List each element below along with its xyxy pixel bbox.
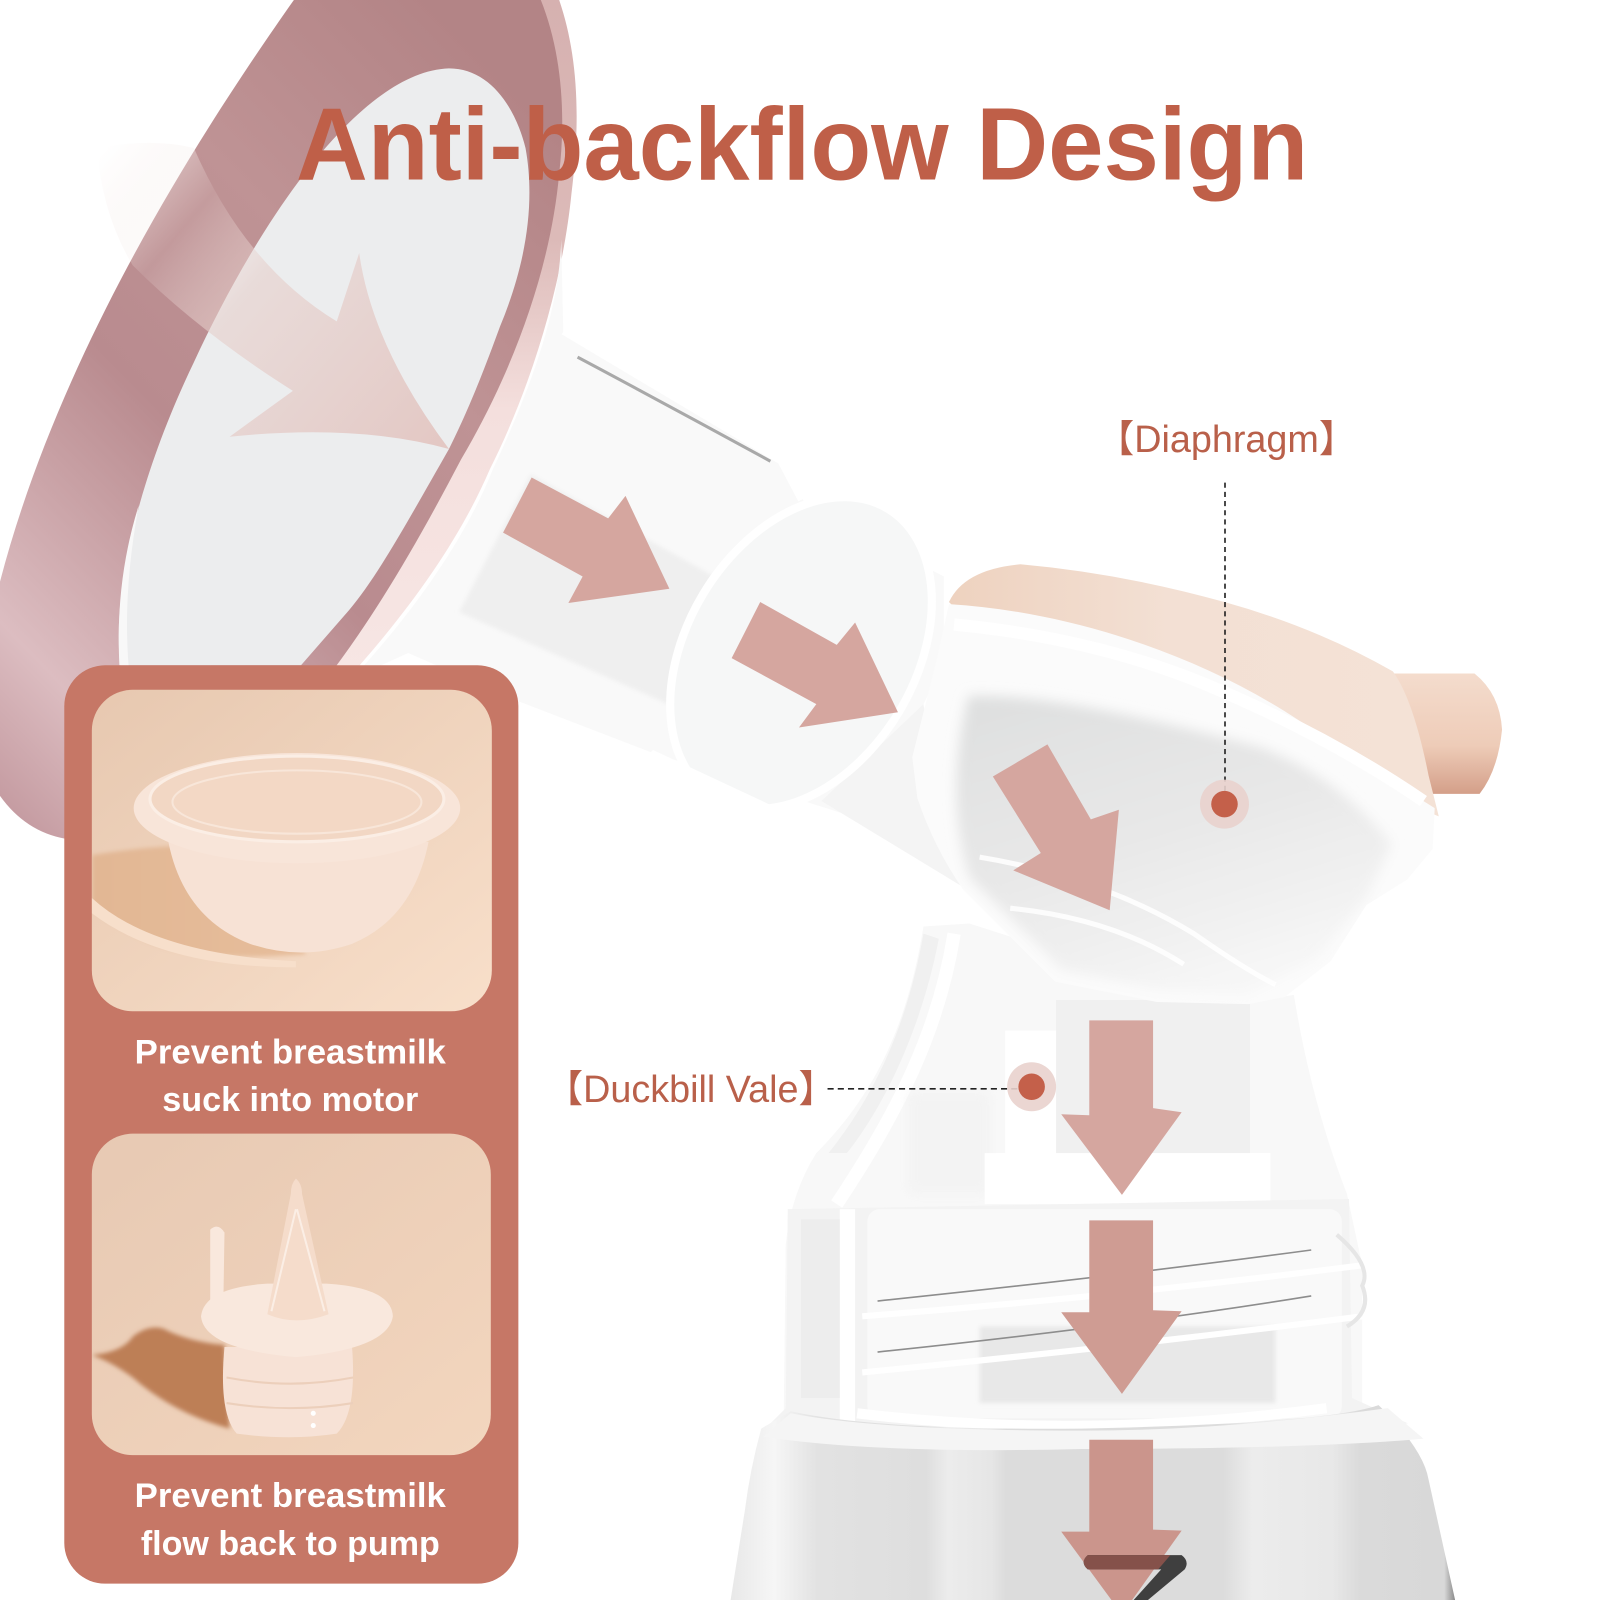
callout: duckbill valve xyxy=(545,1062,1056,1111)
flange inner funnel xyxy=(119,68,529,665)
callout: diaphragm xyxy=(1096,418,1357,829)
text: prevent flow back: flow back to pump xyxy=(141,1525,440,1563)
breast shield flange xyxy=(0,0,577,839)
diaphragm peach lid xyxy=(949,564,1502,816)
text: prevent suck into motor xyxy=(135,1033,447,1119)
large curved arrow xyxy=(97,143,449,449)
arrow: flow in tube 2 xyxy=(732,602,898,728)
text: prevent suck into motor: Prevent breastmilk xyxy=(135,1033,447,1071)
title: Anti-backflow Design xyxy=(296,87,1308,202)
callout: duckbill valve: 【Duckbill Vale】 xyxy=(545,1068,836,1110)
bottle body xyxy=(731,1405,1455,1600)
diaphragm white cup xyxy=(912,604,1435,1004)
arrow: flow through collar xyxy=(1061,1220,1182,1394)
panel: valve parts xyxy=(64,665,518,1584)
bottle logo mark xyxy=(1084,1555,1187,1600)
connector tube xyxy=(352,240,986,918)
card: diaphragm photo xyxy=(92,690,492,1011)
card: duckbill valve photo xyxy=(92,1134,491,1455)
arrow: flow through valve xyxy=(1061,1020,1182,1195)
text: prevent flow back xyxy=(135,1477,447,1563)
text: prevent flow back: Prevent breastmilk xyxy=(135,1477,447,1515)
text: prevent suck into motor: suck into motor xyxy=(162,1081,418,1119)
arrow: flow in diaphragm xyxy=(993,744,1119,910)
callout: diaphragm: 【Diaphragm】 xyxy=(1096,418,1357,460)
arrow: flow in tube 1 xyxy=(503,478,669,603)
threaded collar xyxy=(765,1199,1408,1429)
lower funnel body xyxy=(784,923,1362,1423)
arrow: flow into bottle xyxy=(1061,1440,1182,1600)
